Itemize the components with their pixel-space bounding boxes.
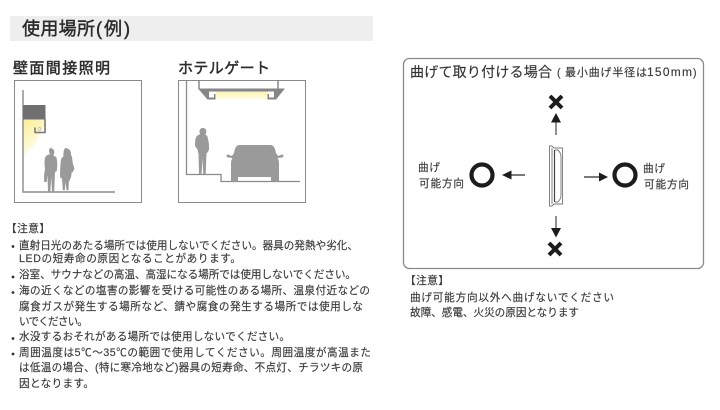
minimum bend radius note xyxy=(557,65,697,79)
label: bendable left xyxy=(418,162,464,190)
icon: circle right xyxy=(614,164,636,186)
minimum bend radius note: 150mm xyxy=(647,65,692,79)
icon: woman silhouette xyxy=(60,148,74,190)
label: bendable left: 曲げ xyxy=(418,162,440,174)
panel: notes on usage xyxy=(6,222,371,390)
icon: circle left xyxy=(472,164,492,186)
arrow: up xyxy=(555,122,557,135)
panel: notes on usage: 【注意】 xyxy=(6,222,50,235)
minimum bend radius note: ( xyxy=(557,67,561,79)
arrow: down xyxy=(555,216,557,228)
label: bendable right xyxy=(643,163,689,191)
icon: fixture cross-section xyxy=(550,146,562,206)
panel: notes on usage: 因となります。 xyxy=(19,378,94,390)
icon: cross bottom xyxy=(549,243,561,255)
notes on bending: 故障、感電、火災の原因となります xyxy=(410,306,579,319)
panel: hotel gate scene xyxy=(178,80,306,202)
panel: notes on usage: 浴室、サウナなどの高温、高湿になる場所では使用しないでください。 xyxy=(19,268,356,281)
icon: person silhouette xyxy=(195,128,209,174)
minimum bend radius note: ) xyxy=(693,67,697,79)
heading band: usage locations: (例) xyxy=(96,19,130,39)
icon: cross top xyxy=(550,96,562,108)
heading: hotel gate: ホテルゲート xyxy=(178,60,270,77)
panel: notes on usage: 水没するおそれがある場所では使用しないでください。 xyxy=(19,330,290,343)
panel: notes on usage: いでください。 xyxy=(19,316,88,328)
panel: notes on usage: 周囲温度は5℃～35℃の範囲で使用してください。周囲温度が高温また xyxy=(19,346,371,359)
notes on bending xyxy=(405,274,614,319)
icon: car front silhouette xyxy=(226,145,284,182)
panel: notes on usage: 海の近くなどの塩害の影響を受ける可能性のある場所、温泉付近などの xyxy=(19,284,370,297)
panel: notes on usage: は低温の場合、(特に寒冷地など)器具の短寿命、不点灯、チラツキの原 xyxy=(19,361,363,374)
heading: wall indirect lighting: 壁面間接照明 xyxy=(13,60,110,77)
label: bendable left: 可能方向 xyxy=(419,177,464,190)
panel: notes on usage: 腐食ガスが発生する場所など、錆や腐食の発生する場所では使用しな xyxy=(19,300,363,313)
panel: notes on usage: LEDの短寿命の原因となることがあります。 xyxy=(19,252,241,265)
minimum bend radius note: 最小曲げ半径は xyxy=(565,65,647,79)
label: bendable right: 曲げ xyxy=(643,163,665,175)
heading band: usage locations: 使用場所 xyxy=(22,19,95,39)
panel: wall indirect lighting scene xyxy=(14,80,142,202)
icon: man silhouette xyxy=(44,148,57,192)
label: bendable right: 可能方向 xyxy=(644,178,689,191)
panel title: 曲げて取り付ける場合 xyxy=(410,64,552,80)
notes on bending: 曲げ可能方向以外へ曲げないでください xyxy=(410,291,614,304)
panel: notes on usage: 直射日光のあたる場所では使用しないでください。器具の発熱や劣化、 xyxy=(19,239,358,252)
panel: bending installation xyxy=(404,58,704,268)
arrow: left xyxy=(511,174,525,176)
arrow: right xyxy=(584,176,599,178)
notes on bending: 【注意】 xyxy=(405,274,449,287)
heading band: usage locations xyxy=(10,16,373,41)
